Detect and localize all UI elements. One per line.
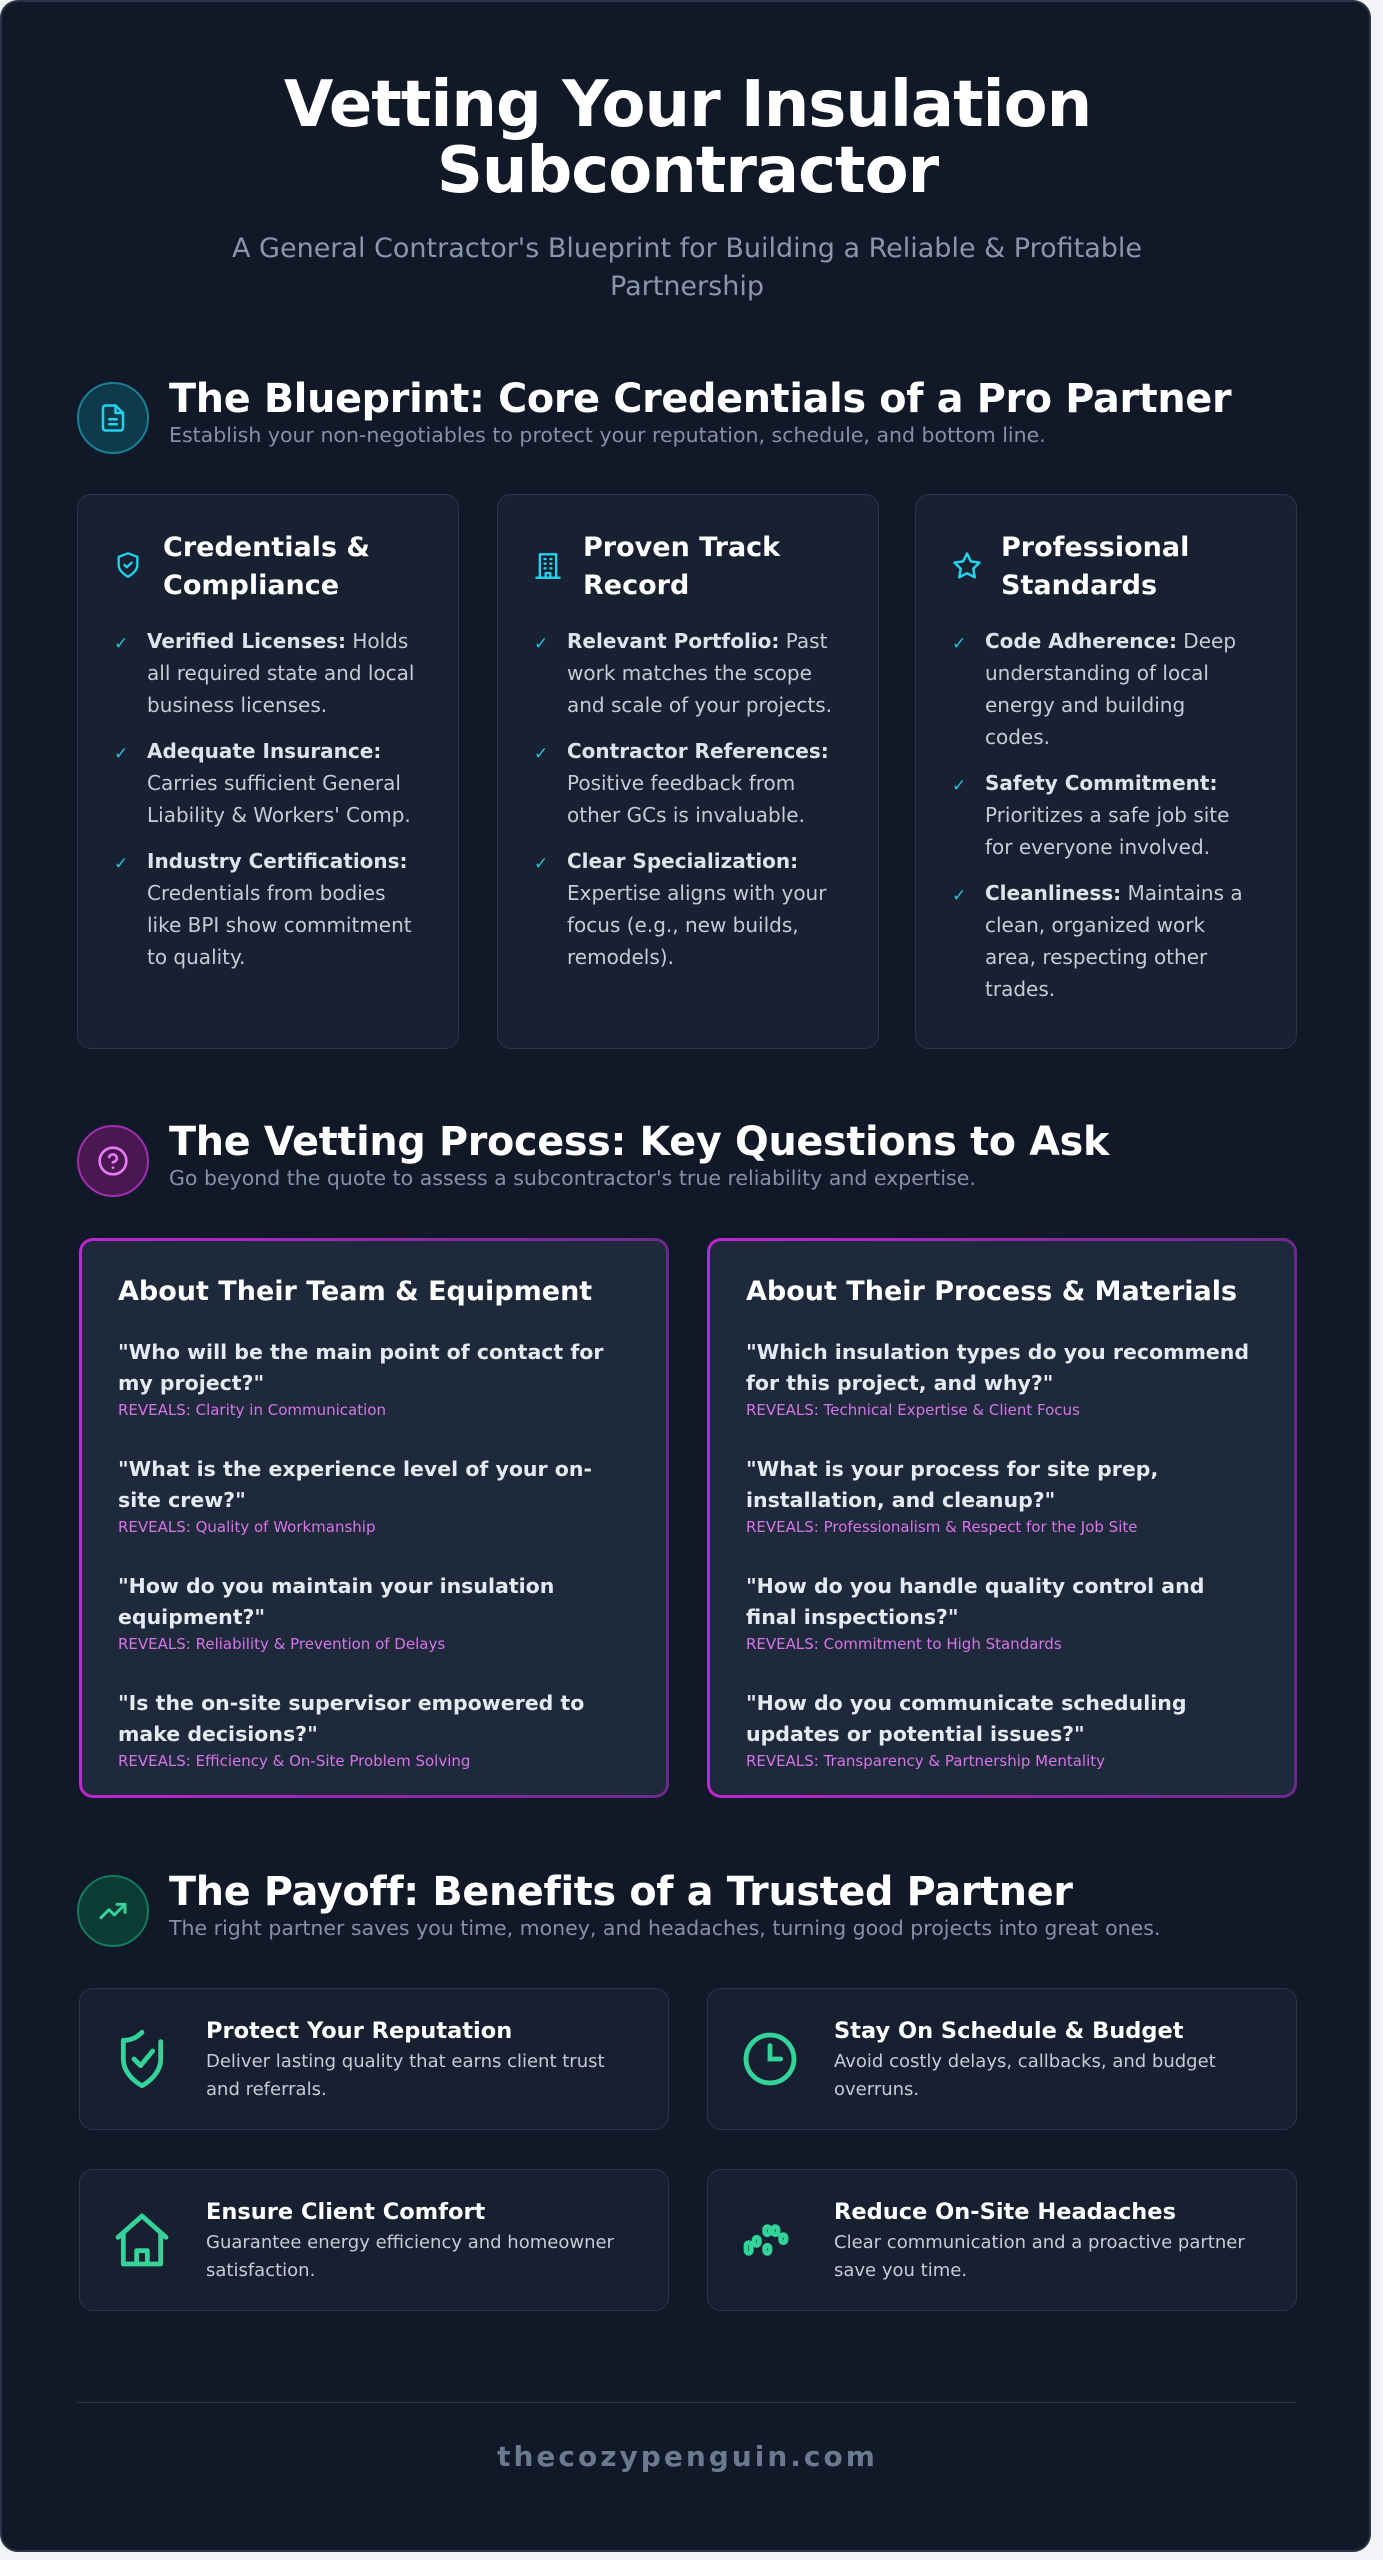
benefit: schedule & budget: Avoid costly delays, callbacks, and budget overruns. [834,2051,1216,2100]
card title: Standards [1001,570,1157,601]
panel: proven track record [497,494,879,1049]
panel: team & equipment questions: "Is the on-site supervisor empowered to make decisions?" [118,1691,584,1746]
title: Subcontractor [437,134,938,208]
benefit: schedule & budget [707,1988,1297,2130]
icon: shield [118,552,138,578]
checklist: Relevant Portfolio: Past work matches the scope and scale of your projects. [567,629,832,717]
heading: The Payoff: Benefits of a Trusted Partner [169,1869,1073,1915]
checklist: Cleanliness: Maintains a clean, organized work area, respecting other trades. [985,881,1243,1001]
checklist: Code Adherence: Deep understanding of local energy and building codes. [985,629,1236,749]
panel: team & equipment questions: "Who will be the main point of contact for my project?" [118,1340,603,1395]
checklist [534,629,832,969]
checklist: ✓ [114,744,128,764]
checklist: Verified Licenses: Holds all required state and local business licenses. [147,629,414,717]
card title [163,532,370,601]
checklist: ✓ [534,744,548,764]
icon: star [953,552,981,578]
benefit: protect reputation [79,1988,669,2130]
benefit: schedule & budget: Stay On Schedule & Budget [834,2018,1184,2044]
subheading: The right partner saves you time, money, and headaches, turning good projects into great ones. [169,1916,1160,1940]
panel: team & equipment questions: REVEALS: Efficiency & On-Site Problem Solving [118,1752,470,1770]
card title [583,532,780,601]
panel: team & equipment questions: "How do you maintain your insulation equipment?" [118,1574,554,1629]
checklist: Clear Specialization: Expertise aligns with your focus (e.g., new builds, remodels). [567,849,826,969]
checklist: ✓ [114,634,128,654]
benefit: client comfort: Ensure Client Comfort [206,2199,485,2225]
benefit: reduce headaches: Reduce On-Site Headaches [834,2199,1176,2225]
title: Vetting Your Insulation [284,68,1091,142]
heading: The Vetting Process: Key Questions to Ask [169,1119,1109,1165]
panel: team & equipment questions: REVEALS: Quality of Workmanship [118,1518,376,1536]
heading: The Blueprint: Core Credentials of a Pro Partner [169,376,1231,422]
icon: building [535,553,561,579]
checklist: ✓ [952,886,966,906]
panel: process & materials questions: REVEALS: Technical Expertise & Client Focus [746,1401,1080,1419]
panel: process & materials questions: "How do you communicate scheduling updates or potential issues?" [746,1691,1187,1746]
icon: document [77,382,149,454]
card title: Credentials & [163,532,370,563]
checklist: ✓ [952,776,966,796]
checklist: ✓ [114,854,128,874]
checklist [114,629,414,969]
panel: process & materials questions: REVEALS: Transparency & Partnership Mentality [746,1752,1105,1770]
checklist: Contractor References: Positive feedback from other GCs is invaluable. [567,739,829,827]
benefit: client comfort [79,2169,669,2311]
benefit: reduce headaches [707,2169,1297,2311]
title [284,68,1091,208]
footer: thecozypenguin.com [497,2440,878,2473]
card title: Professional [1001,532,1189,563]
card title [1001,532,1189,601]
card title: Record [583,570,689,601]
checklist: Industry Certifications: Credentials from bodies like BPI show commitment to quality. [147,849,412,969]
box heading: About Their Process & Materials [746,1276,1237,1307]
benefit: protect reputation: Deliver lasting quality that earns client trust and referrals. [206,2051,605,2100]
subheading: Establish your non-negotiables to protect your reputation, schedule, and bottom line. [169,423,1046,447]
icon: clock [744,2032,796,2086]
section header: vetting process [77,1119,1110,1197]
panel: process & materials questions: REVEALS: Professionalism & Respect for the Job Site [746,1518,1137,1536]
icon: house [116,2214,168,2266]
panel: team & equipment questions: REVEALS: Reliability & Prevention of Delays [118,1635,445,1653]
subtitle: A General Contractor's Blueprint for Building a Reliable & Profitable Partnership [232,233,1142,302]
panel: process & materials questions: "Which insulation types do you recommend for this project, and why?" [746,1340,1249,1395]
card title: Proven Track [583,532,780,563]
section header: payoff [77,1869,1160,1947]
checklist: ✓ [534,634,548,654]
panel: credentials & compliance [77,494,459,1049]
benefit: reduce headaches: Clear communication and a proactive partner save you time. [834,2232,1245,2281]
panel: professional standards [915,494,1297,1049]
panel: team & equipment questions [79,1238,669,1798]
subheading: Go beyond the quote to assess a subcontractor's true reliability and expertise. [169,1166,976,1190]
panel: process & materials questions: REVEALS: Commitment to High Standards [746,1635,1062,1653]
box heading: About Their Team & Equipment [118,1276,592,1307]
section header: blueprint [77,376,1232,454]
icon: trending up [77,1875,149,1947]
panel: team & equipment questions: REVEALS: Clarity in Communication [118,1401,386,1419]
checklist: Safety Commitment: Prioritizes a safe job site for everyone involved. [985,771,1229,859]
panel: process & materials questions [707,1238,1297,1798]
checklist: ✓ [534,854,548,874]
checklist: ✓ [952,634,966,654]
panel: team & equipment questions: "What is the experience level of your on-site crew?" [118,1457,592,1512]
icon: shield check [120,2030,164,2088]
card title: Compliance [163,570,339,601]
checklist: Adequate Insurance: Carries sufficient General Liability & Workers' Comp. [147,739,411,827]
checklist [952,629,1243,1001]
panel: process & materials questions: "What is your process for site prep, installation, and cleanup?" [746,1457,1158,1512]
icon: question [77,1125,149,1197]
benefit: protect reputation: Protect Your Reputation [206,2018,512,2044]
icon: footprints [744,2224,788,2256]
benefit: client comfort: Guarantee energy efficiency and homeowner satisfaction. [206,2232,614,2281]
panel: process & materials questions: "How do you handle quality control and final inspections?" [746,1574,1204,1629]
